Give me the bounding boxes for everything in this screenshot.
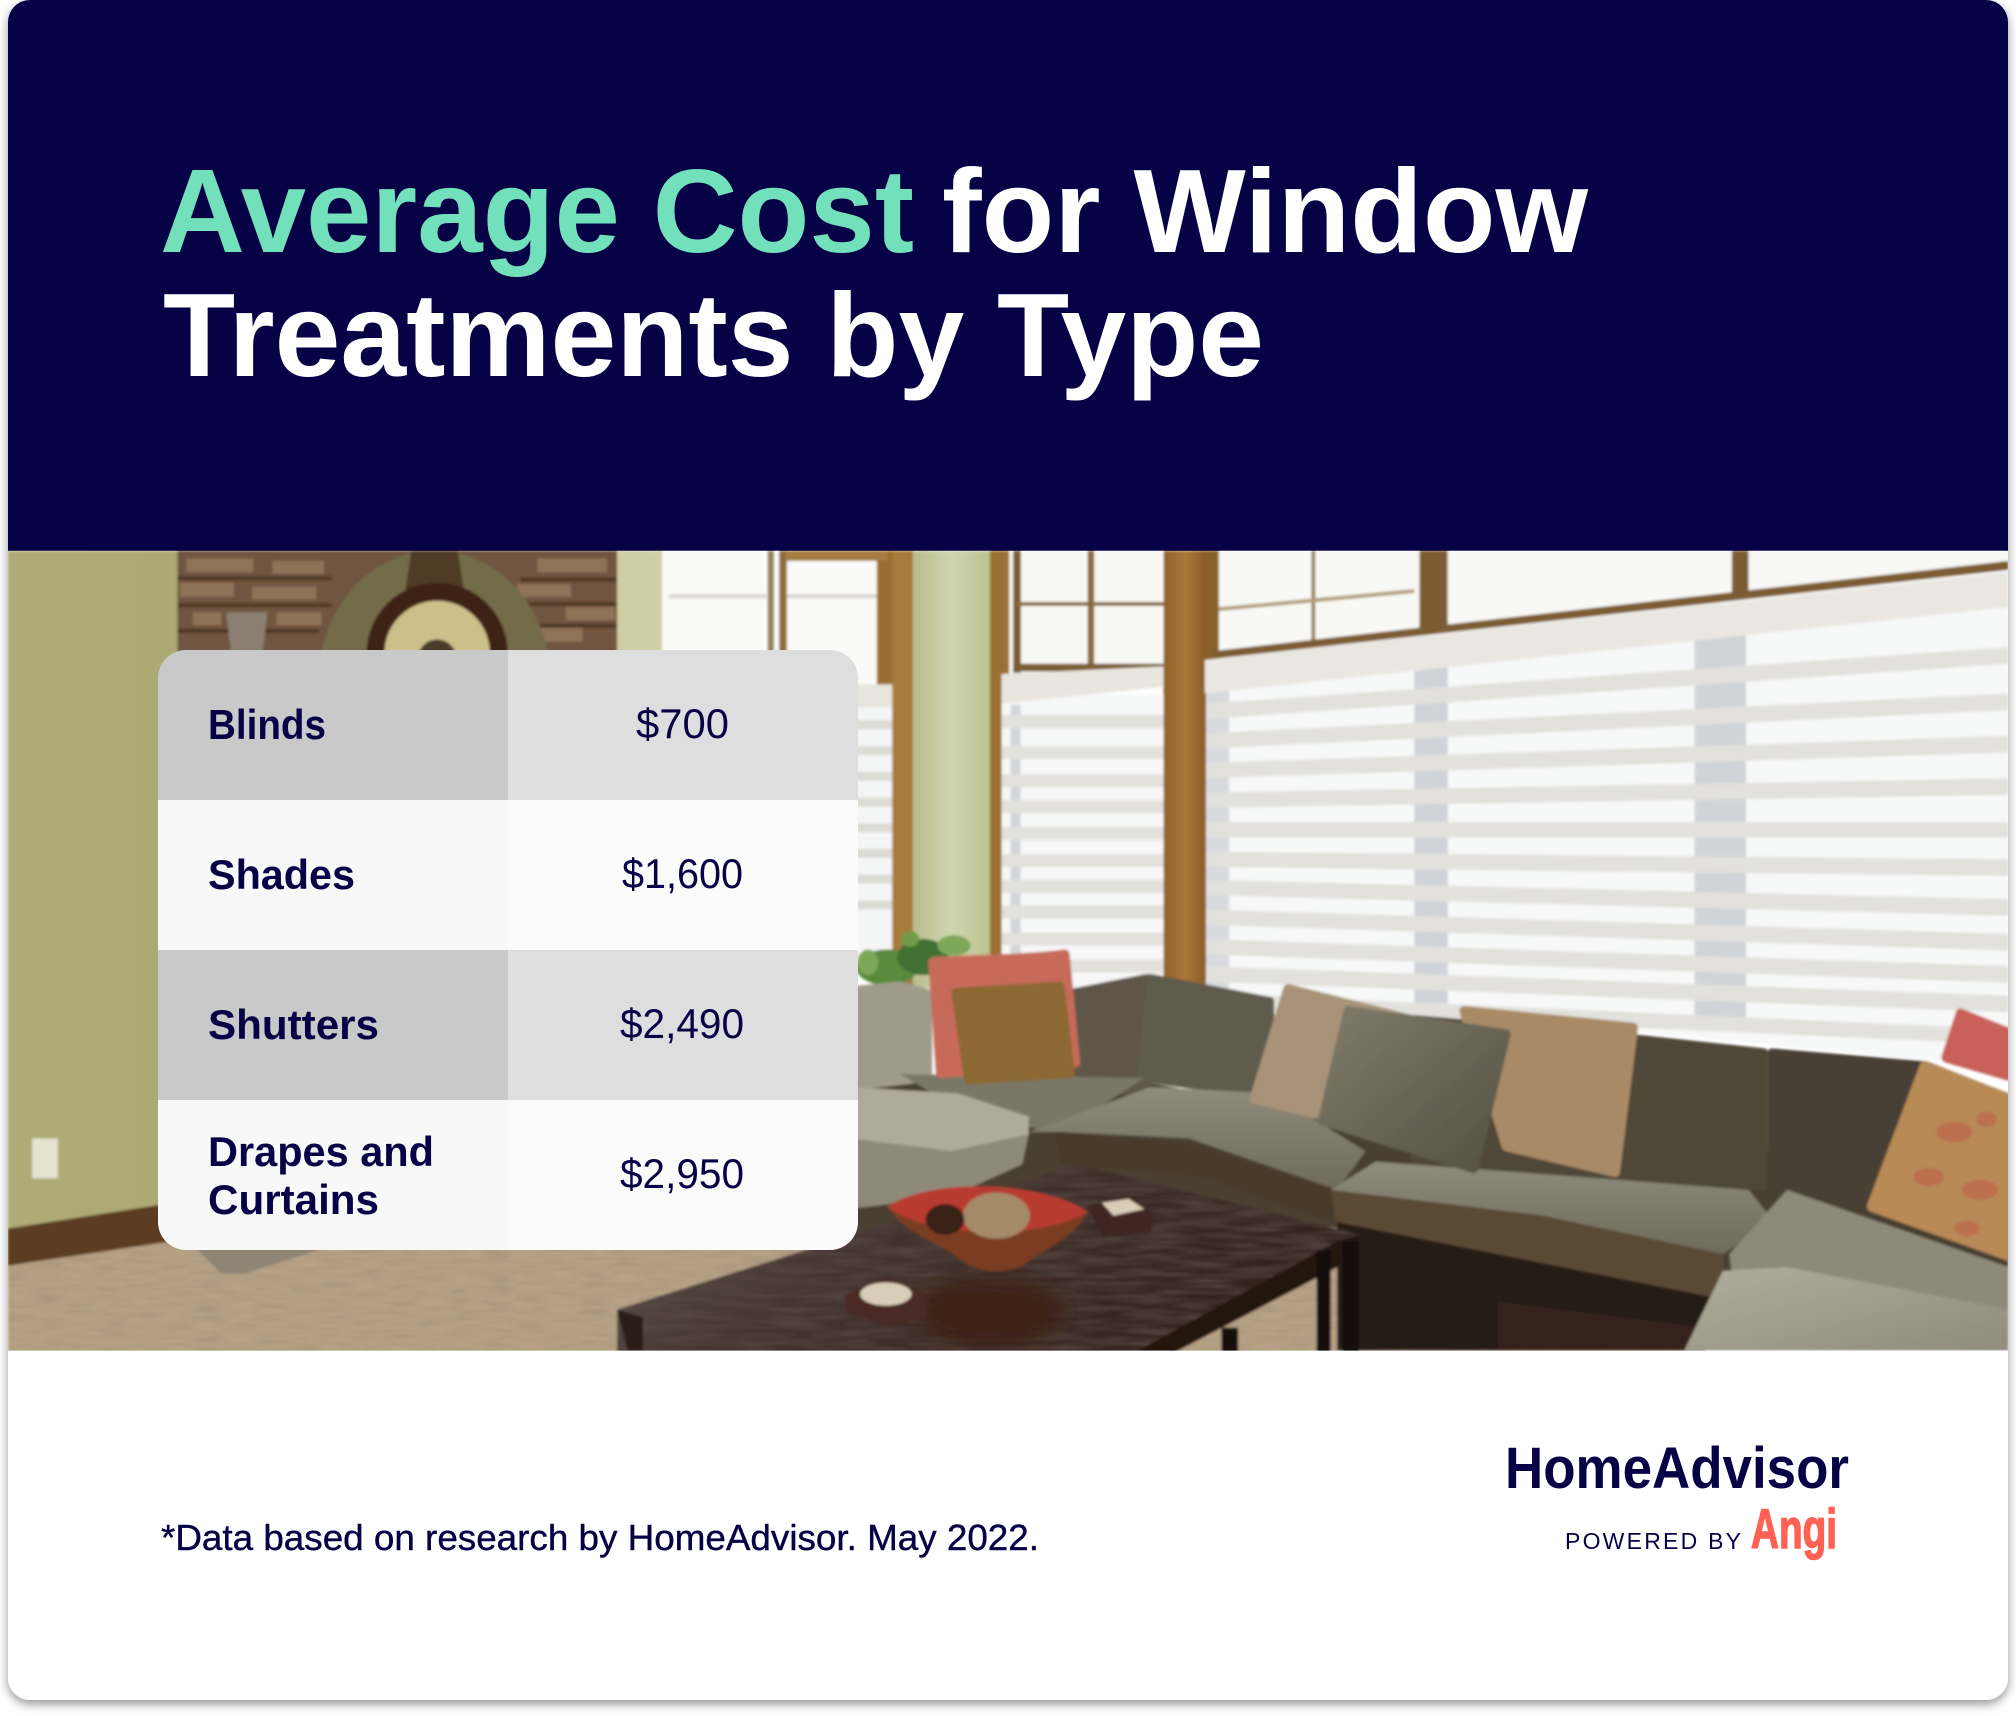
row: blinds: Blinds [208,701,326,748]
row: drapes and curtains: Curtains [208,1176,379,1223]
row: shutters [158,950,858,1100]
upper transom windows [1206,551,2008,666]
row: shades [158,800,858,950]
logo: HomeAdvisor powered by Angi: Angi [1751,1497,1837,1560]
left wall [8,550,180,1230]
header panel [8,0,2008,551]
row: drapes and curtains [158,1100,858,1250]
title: Average Cost [160,145,914,278]
logo: HomeAdvisor powered by Angi: POWERED BY [1565,1528,1741,1554]
title: for Window [942,145,1588,278]
far corner window [617,551,900,692]
wall clock [322,550,548,650]
title [160,145,1588,402]
sofa pillows [933,954,2008,1255]
baseboard [8,1204,168,1267]
large window shade [1205,572,2008,1068]
sofa back cushions [858,972,1967,1173]
shades beside table [849,551,913,988]
title: Treatments by Type [163,269,1264,402]
logo: HomeAdvisor powered by Angi: HomeAdvisor [1505,1436,1849,1501]
footnote: *Data based on research by HomeAdvisor. May 2022. [161,1517,1039,1558]
carpet [8,1242,1706,1351]
row: drapes and curtains: Drapes and [208,1128,434,1175]
power outlet [32,1138,58,1178]
plant [856,931,971,985]
photo: living room with window shades [8,551,2008,1358]
sofa base [849,1068,2008,1351]
cost table [158,650,858,1250]
coasters [845,1196,1152,1325]
row: blinds [158,650,858,800]
sofa seats [849,1074,2008,1351]
logo: HomeAdvisor powered by Angi [1505,1436,1849,1560]
row: drapes and curtains: $2,950 [620,1150,744,1197]
row: shades: $1,600 [622,850,743,897]
pillow pattern [1913,1111,1998,1236]
coffee table [617,1164,1360,1358]
green wall between windows [910,551,993,988]
stone fireplace wall [176,550,618,652]
decorative bowl [887,1186,1088,1271]
row: shades: Shades [208,851,355,898]
left window frame and panes [990,551,1166,988]
glass vase [226,612,267,656]
wood post [1164,551,1206,994]
row: shutters: Shutters [208,1001,379,1048]
left window shade [1002,666,1164,988]
row: blinds: $700 [636,700,729,747]
row: shutters: $2,490 [620,1000,744,1047]
hearth corner [196,1250,322,1274]
